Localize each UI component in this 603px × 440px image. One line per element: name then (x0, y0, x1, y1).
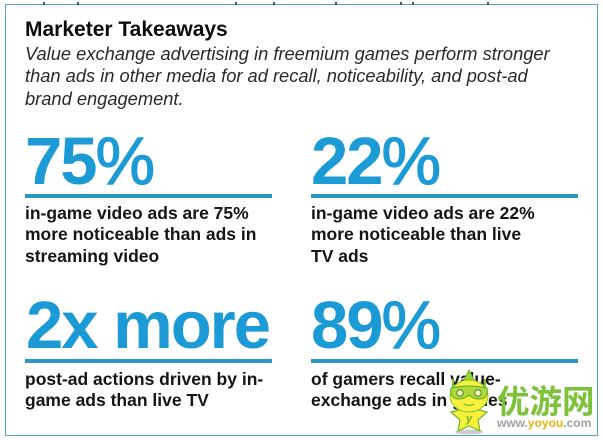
description: streaming video (25, 246, 159, 266)
description: post-ad actions driven by in- (25, 369, 263, 389)
number 2x more: 2x more (26, 288, 269, 363)
intro text (25, 43, 550, 109)
number 22%: 22% (311, 124, 441, 199)
intro text: than ads in other media for ad recall, noticeability, and post-ad (25, 65, 528, 86)
intro text: brand engagement. (25, 88, 184, 109)
description: exchange ads in games (311, 390, 507, 410)
description: of gamers recall value- (311, 369, 501, 389)
description: in-game video ads are 75% (25, 203, 249, 223)
stat: 89% (311, 288, 578, 410)
number 89%: 89% (311, 288, 441, 363)
logo url: www.yoyou.com (497, 416, 591, 430)
stat: 22% (311, 124, 578, 266)
heading: Marketer Takeaways (25, 18, 228, 41)
watermark logo: yoyou (497, 384, 595, 430)
number 75%: 75% (25, 124, 155, 199)
rule (311, 194, 578, 198)
rule (25, 194, 272, 198)
description: more noticeable than ads in (25, 224, 256, 244)
icon: yoyou mascot watermark (450, 369, 488, 434)
icon: yoyou mascot watermark: y (465, 413, 473, 425)
rule (311, 359, 578, 363)
description: game ads than live TV (25, 390, 209, 410)
description (311, 369, 507, 410)
description (25, 203, 256, 266)
description: TV ads (311, 246, 368, 266)
cropped text remnants above frame (43, 2, 489, 5)
intro text: Value exchange advertising in freemium games perform stronger (25, 43, 550, 64)
description (25, 369, 263, 410)
description (311, 203, 535, 266)
stat: 2x more (25, 288, 272, 410)
rule (25, 359, 272, 363)
stat: 75% (25, 124, 272, 266)
description: in-game video ads are 22% (311, 203, 535, 223)
description: more noticeable than live (311, 224, 521, 244)
logo text: 优游网 (497, 384, 595, 420)
